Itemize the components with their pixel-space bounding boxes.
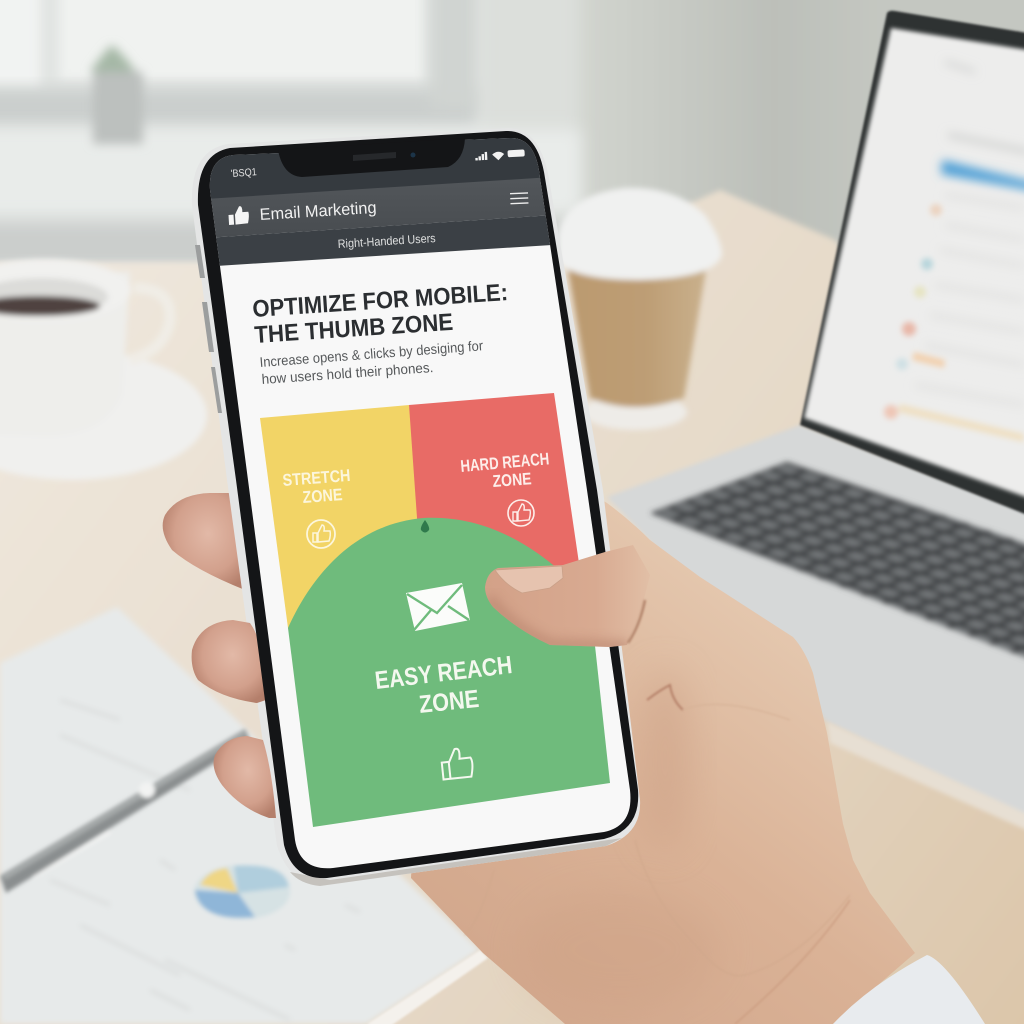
stretch zone: [260, 405, 428, 640]
status icons: [475, 149, 525, 161]
thumb zone chart: [260, 393, 610, 827]
icon: envelope: [406, 583, 470, 631]
icon: stretch thumbs up: [307, 520, 335, 548]
palm shading and creases: [465, 670, 850, 1024]
hand: palm and wrist: [411, 500, 985, 1024]
status bar clock: 'BSQ1: [230, 166, 257, 180]
sub header text: Right-Handed Users: [337, 231, 436, 251]
thumb underside shading: [488, 598, 628, 647]
icon: easy reach thumbs up: [440, 747, 474, 779]
hard reach zone label: HARD REACH: [460, 449, 550, 476]
laptop lid: [800, 11, 1024, 520]
sub header bar: [216, 216, 550, 266]
thumb overlapping the screen: [485, 545, 650, 647]
hard reach zone: [409, 393, 580, 570]
heading: THE THUMB ZONE: [254, 309, 454, 349]
icon: hard reach thumbs up: [508, 500, 534, 526]
status bar: [210, 138, 540, 200]
boundary drop marker: [421, 520, 429, 532]
notebook with pen and pie chart: [0, 607, 488, 1024]
thumb crease: [628, 600, 645, 643]
keyboard: [650, 462, 1024, 663]
notebook page: [0, 607, 480, 1024]
coffee mug and saucer: [0, 259, 207, 480]
speaker and camera: [353, 152, 416, 161]
finger three: [214, 736, 276, 818]
heading: [252, 279, 509, 349]
easy reach zone label: EASY REACH: [373, 651, 514, 695]
header title: Email Marketing: [259, 199, 377, 224]
finger one: [163, 493, 245, 590]
laptop screen: [804, 28, 1024, 502]
subheading: how users hold their phones.: [261, 359, 434, 387]
stretch zone label: STRETCH: [282, 466, 351, 490]
phone screen: [210, 138, 630, 868]
laptop base: [607, 425, 1024, 826]
notch: [278, 138, 465, 177]
plant on window sill: [90, 45, 143, 144]
side buttons: [195, 245, 222, 413]
easy reach zone label: ZONE: [418, 685, 480, 719]
phone silver frame: [192, 128, 640, 886]
phone: [190, 120, 650, 890]
heading: OPTIMIZE FOR MOBILE:: [252, 279, 509, 323]
easy reach zone: [288, 518, 610, 827]
pen: [0, 729, 250, 893]
pie chart: [194, 865, 290, 919]
shirt cuff: [833, 955, 985, 1024]
stretch zone label: [282, 466, 351, 507]
hard reach zone label: [460, 449, 550, 491]
finger two: [192, 620, 266, 703]
paper coffee cup: [558, 188, 722, 430]
laptop: [607, 11, 1024, 836]
hard reach zone label: ZONE: [492, 469, 532, 491]
app header bar: [211, 178, 546, 238]
stretch zone label: ZONE: [302, 485, 343, 507]
icon: hamburger menu: [510, 192, 528, 204]
thumbnail: [495, 566, 563, 593]
subheading: [259, 337, 484, 387]
icon: thumbs up header: [228, 206, 249, 225]
subheading: Increase opens & clicks by desiging for: [259, 337, 484, 370]
phone black bezel: [198, 131, 638, 878]
easy reach zone label: [373, 651, 514, 719]
